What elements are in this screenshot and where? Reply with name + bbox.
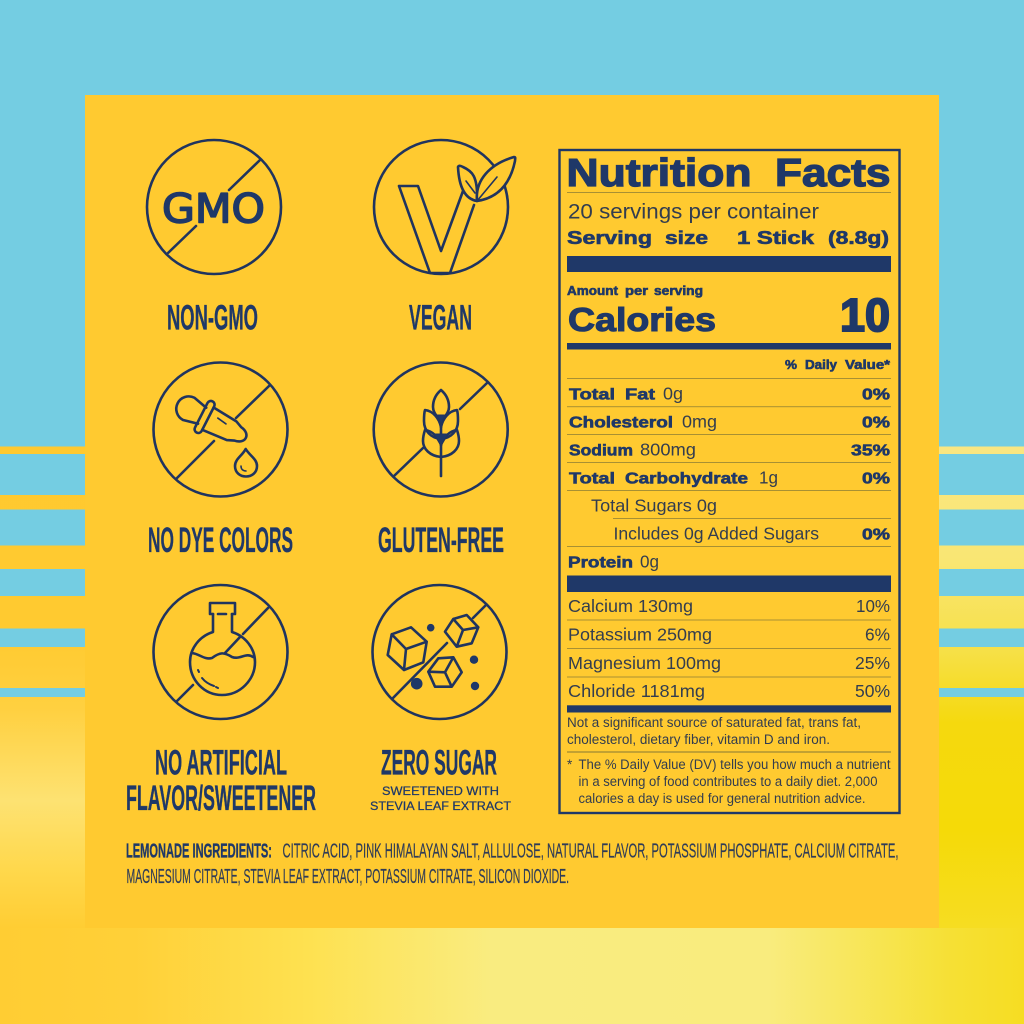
heading: nutrition facts: Nutrition bbox=[566, 152, 752, 195]
serving information: 20 servings per container bbox=[568, 200, 819, 224]
label: no artificial flavor bbox=[126, 744, 316, 818]
ingredients text bbox=[126, 840, 898, 888]
calories: per bbox=[625, 284, 648, 298]
panel: yellow card bbox=[85, 95, 939, 928]
icon: GMO crossed circle bbox=[147, 140, 281, 274]
label: no artificial flavor: NO ARTIFICIAL bbox=[155, 744, 287, 782]
calories: serving bbox=[654, 284, 703, 298]
serving information: (8.8g) bbox=[828, 228, 889, 248]
mineral rows: 25% bbox=[855, 653, 890, 673]
label: stevia note: SWEETENED WITH bbox=[382, 784, 499, 798]
calories bbox=[567, 284, 890, 341]
mineral rows bbox=[567, 596, 891, 701]
badge: zero sugar bbox=[370, 585, 512, 813]
footnote: daily value: The % Daily Value (DV) tells you how much a nutrient bbox=[578, 757, 891, 772]
macronutrient rows: 800mg bbox=[640, 439, 696, 459]
footnote: daily value: * bbox=[567, 757, 573, 772]
label: stevia note: STEVIA LEAF EXTRACT bbox=[370, 799, 512, 813]
macronutrient rows: Carbohydrate bbox=[625, 470, 748, 487]
mineral rows: 10% bbox=[856, 596, 890, 616]
mineral rows: Potassium 250mg bbox=[568, 624, 712, 644]
footnote: daily value: calories a day is used for general nutrition advice. bbox=[578, 791, 866, 806]
macronutrient rows: Includes 0g Added Sugars bbox=[614, 523, 819, 543]
mineral rows: 6% bbox=[865, 624, 890, 644]
macronutrient rows: Sodium bbox=[569, 442, 633, 459]
icon: dropper crossed circle bbox=[154, 362, 288, 496]
macronutrient rows: 0g bbox=[663, 383, 683, 403]
serving information: 1 Stick bbox=[737, 228, 815, 248]
macronutrient rows: Total Sugars 0g bbox=[591, 495, 717, 515]
macronutrient rows: Total bbox=[569, 470, 615, 487]
percent daily value header: % bbox=[785, 358, 797, 372]
footnote: not a significant source: Not a significant source of saturated fat, trans fat, bbox=[567, 715, 861, 730]
footnote: daily value bbox=[567, 757, 891, 806]
icon: flask crossed circle bbox=[154, 585, 288, 719]
badge: vegan bbox=[374, 140, 515, 338]
mineral rows: 50% bbox=[855, 681, 890, 701]
calories: Amount bbox=[567, 284, 619, 298]
macronutrient rows: 0% bbox=[862, 386, 890, 403]
footnote: not a significant source: cholesterol, dietary fiber, vitamin D and iron. bbox=[567, 732, 830, 747]
macronutrient rows: Fat bbox=[625, 386, 656, 403]
panel: nutrition facts label bbox=[560, 150, 900, 813]
footnote: daily value: in a serving of food contributes to a daily diet. 2,000 bbox=[578, 774, 878, 789]
macronutrient rows: 1g bbox=[759, 467, 778, 487]
macronutrient rows: Protein bbox=[568, 554, 633, 571]
heading: nutrition facts: Facts bbox=[775, 152, 890, 195]
percent daily value header: Daily bbox=[805, 358, 837, 372]
text: NO DYE COLORS bbox=[148, 521, 293, 560]
footnote: not a significant source bbox=[567, 715, 861, 747]
mineral rows: Magnesium 100mg bbox=[568, 653, 721, 673]
serving information: Serving bbox=[567, 228, 652, 248]
ingredients text: LEMONADE INGREDIENTS: bbox=[126, 840, 272, 862]
icon: wheat crossed circle bbox=[374, 362, 508, 496]
label: gluten-free: GLUTEN-FREE bbox=[378, 521, 504, 560]
macronutrient rows: 0% bbox=[862, 414, 890, 431]
macronutrient rows: Total bbox=[569, 386, 615, 403]
icon: V with leaves bbox=[374, 140, 515, 274]
ingredients text: MAGNESIUM CITRATE, STEVIA LEAF EXTRACT, POTASSIUM CITRATE, SILICON DIOXIDE. bbox=[126, 866, 569, 888]
macronutrient rows: 35% bbox=[851, 442, 890, 459]
percent daily value header: Value* bbox=[845, 358, 890, 372]
badge: no artificial flavor bbox=[126, 585, 316, 818]
icon: GMO crossed circle: GMO bbox=[162, 186, 265, 232]
serving information: size bbox=[665, 228, 708, 248]
label: no artificial flavor: FLAVOR/SWEETENER bbox=[126, 779, 316, 818]
badge: non-GMO bbox=[147, 140, 281, 338]
label: stevia note bbox=[370, 784, 512, 813]
badge: gluten-free bbox=[374, 362, 508, 560]
macronutrient rows: 0mg bbox=[682, 411, 717, 431]
icon: sugar cubes crossed circle bbox=[372, 585, 506, 719]
label: non-GMO: NON-GMO bbox=[167, 298, 258, 338]
mineral rows: Calcium 130mg bbox=[568, 596, 693, 616]
heading: nutrition facts bbox=[566, 152, 890, 195]
badge: zero sugar: ZERO SUGAR bbox=[381, 744, 497, 782]
macronutrient rows: Cholesterol bbox=[569, 414, 673, 431]
macronutrient rows bbox=[567, 383, 891, 571]
badge: no dye colors bbox=[148, 362, 293, 560]
calories: 10 bbox=[840, 289, 890, 341]
macronutrient rows: 0g bbox=[640, 551, 659, 571]
mineral rows: Chloride 1181mg bbox=[568, 681, 705, 701]
macronutrient rows: 0% bbox=[862, 470, 890, 487]
macronutrient rows: 0% bbox=[862, 526, 890, 543]
percent daily value header bbox=[785, 358, 890, 372]
serving information bbox=[567, 200, 889, 248]
calories: Calories bbox=[568, 301, 716, 338]
label: vegan: VEGAN bbox=[409, 298, 472, 338]
